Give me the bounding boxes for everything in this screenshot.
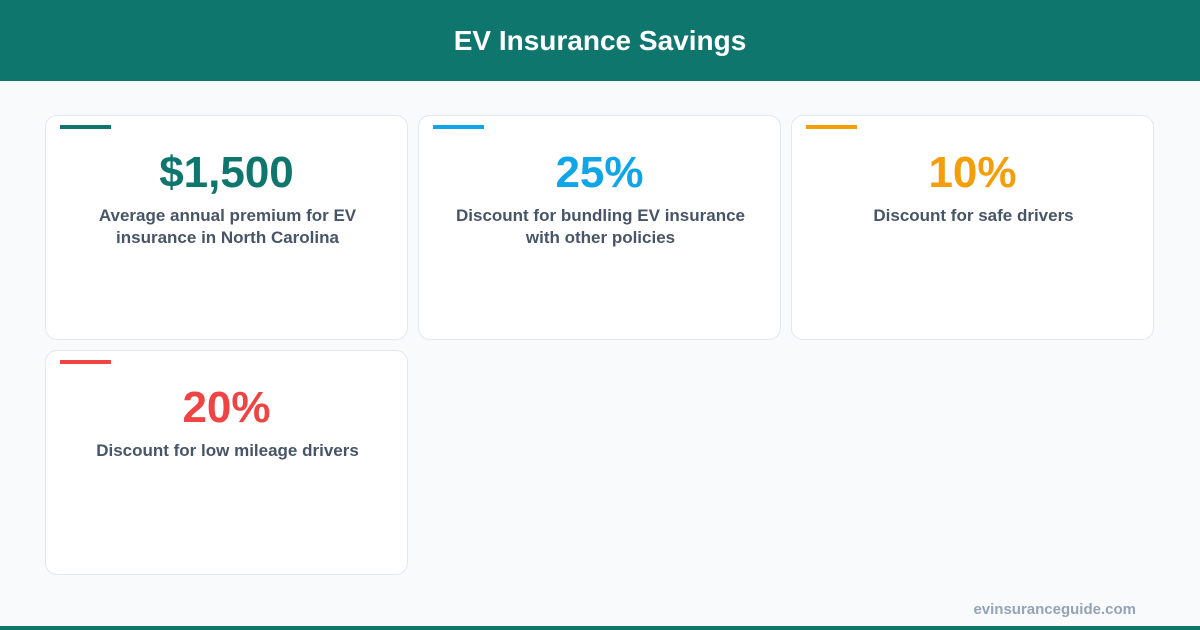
text: bundling description: Discount for bundling EV insurance with other policies xyxy=(456,206,745,247)
title: EV Insurance Savings xyxy=(454,25,746,56)
panel: bundling discount xyxy=(418,115,781,340)
stat: 10%: 10% xyxy=(928,148,1017,197)
text: safe driver description: Discount for safe drivers xyxy=(873,206,1074,225)
footer source: evinsuranceguide.com xyxy=(973,601,1136,618)
text: low mileage description: Discount for low mileage drivers xyxy=(96,441,359,460)
stat: $1,500: $1,500 xyxy=(159,148,294,197)
stat: 25%: 25% xyxy=(555,148,644,197)
panel: safe driver discount xyxy=(791,115,1154,340)
panel: low mileage discount xyxy=(45,350,408,575)
panel: average premium xyxy=(45,115,408,340)
title xyxy=(0,0,1200,81)
text: premium description: Average annual premium for EV insurance in North Carolina xyxy=(99,206,356,247)
stat: 20%: 20% xyxy=(182,383,271,432)
